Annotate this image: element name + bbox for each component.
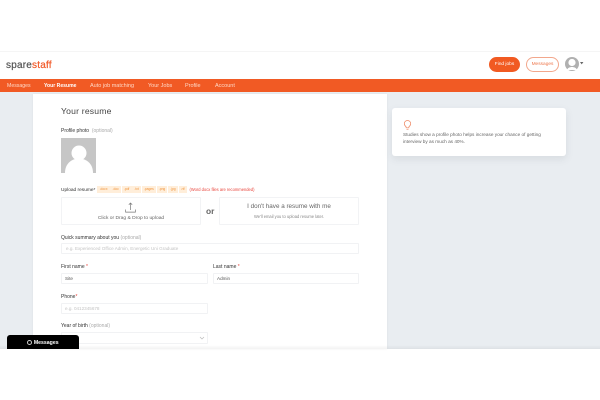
tip text: interview by as much as 40%. <box>403 139 465 144</box>
label: upload resume with file types: .docx <box>100 187 107 191</box>
panel: resume form <box>33 94 387 349</box>
label: upload resume with file types: .txt <box>134 187 139 191</box>
nav: messages: Messages <box>7 83 31 89</box>
panel: tip card <box>392 108 566 156</box>
label: upload resume with file types: .rtf <box>181 187 185 191</box>
label: last name: Last name * <box>213 264 240 270</box>
label: upload resume with file types: .pdf <box>124 187 129 191</box>
no resume heading: I don't have a resume with me <box>247 203 331 210</box>
header bar <box>0 51 600 79</box>
messages button: Messages <box>532 62 553 67</box>
messages button <box>526 57 559 72</box>
label: upload resume with file types: .jpg <box>170 187 176 191</box>
user avatar with caret <box>565 57 584 71</box>
input: last name <box>213 273 359 284</box>
nav: your jobs: Your Jobs <box>148 83 172 89</box>
nav: your resume: Your Resume <box>44 83 76 89</box>
app background <box>0 92 600 349</box>
orange navigation bar <box>0 79 600 92</box>
label: upload resume with file types: .doc <box>113 187 119 191</box>
label: year of birth: Year of birth (optional) <box>61 322 110 328</box>
input: phone: e.g. 0412345678 <box>65 306 100 310</box>
nav: profile: Profile <box>185 83 201 89</box>
no resume box <box>219 197 359 225</box>
heading: your resume: Your resume <box>61 106 112 116</box>
icon: profile photo placeholder <box>61 138 96 173</box>
icon: light bulb <box>404 120 411 130</box>
find jobs button <box>489 57 520 72</box>
label: upload resume with file types: .pages <box>144 187 154 191</box>
input: year of birth select <box>61 332 208 344</box>
icon: upload <box>125 202 136 212</box>
label: phone: Phone* <box>61 294 77 300</box>
messages chat tab: Messages <box>34 340 59 346</box>
label: upload resume with file types: Upload resume* (Word docx files are recommended) <box>61 187 254 193</box>
upload instruction: Click or Drag & Drop to upload <box>98 216 164 221</box>
input: summary <box>61 243 359 254</box>
find jobs button: Find jobs <box>495 62 514 67</box>
upload box <box>61 197 201 225</box>
bottom fade shadow <box>0 345 600 349</box>
tip text <box>403 132 541 144</box>
nav: account: Account <box>215 83 235 89</box>
or separator: or <box>206 206 214 216</box>
input: last name: Admin <box>217 276 230 281</box>
label: profile photo: Profile photo (optional) <box>61 128 113 134</box>
input: first name: Site <box>65 276 73 281</box>
tip text: Studies show a profile photo helps increase your chance of getting <box>403 132 541 137</box>
nav: auto job matching: Auto job matching <box>90 83 134 89</box>
label: quick summary: Quick summary about you (optional) <box>61 235 141 241</box>
no resume subtext: We'll email you to upload resume later. <box>254 214 324 218</box>
label: upload resume with file types: .png <box>159 187 165 191</box>
messages chat tab <box>7 335 79 349</box>
logo: sparestaff <box>6 60 52 71</box>
input: summary: e.g. Experienced Office Admin, Energetic Uni Graduate <box>66 246 178 251</box>
label: first name: First name * <box>61 264 88 270</box>
input: phone <box>61 302 208 314</box>
icon: dropdown chevron <box>200 336 204 340</box>
input: first name <box>61 273 208 284</box>
